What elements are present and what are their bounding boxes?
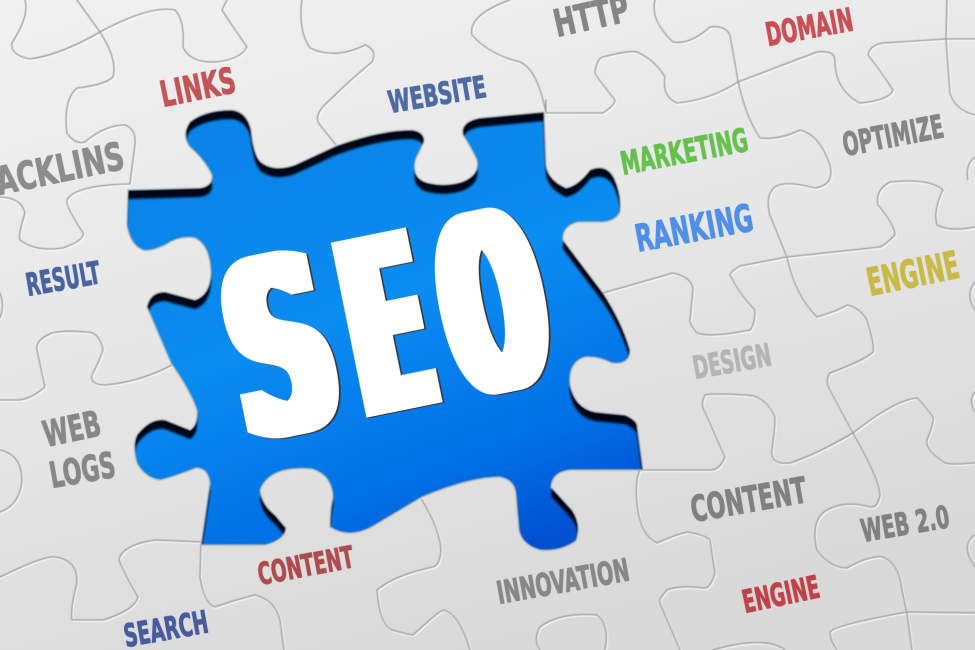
SEO headline: S	[204, 199, 358, 498]
label: CONTENT red: CONTENT	[255, 540, 357, 593]
label: WEB: WEB	[39, 404, 105, 456]
label: CONTENT gray: CONTENT	[687, 470, 810, 531]
label: RESULT: RESULT	[23, 255, 103, 304]
SEO headline: E	[322, 180, 451, 474]
label: DESIGN: DESIGN	[690, 337, 774, 387]
label: WEBSITE: WEBSITE	[386, 70, 489, 121]
label: INNOVATION: INNOVATION	[494, 552, 632, 612]
label: ENGINE red: ENGINE	[739, 570, 823, 621]
label: LOGS: LOGS	[46, 445, 119, 497]
SEO headline: O	[418, 157, 568, 455]
label: MARKETING: MARKETING	[617, 121, 751, 183]
label: LINKS: LINKS	[157, 60, 239, 116]
blue hole in the puzzle	[126, 108, 644, 552]
label: RANKING: RANKING	[632, 197, 757, 261]
SEO headline	[204, 157, 568, 498]
